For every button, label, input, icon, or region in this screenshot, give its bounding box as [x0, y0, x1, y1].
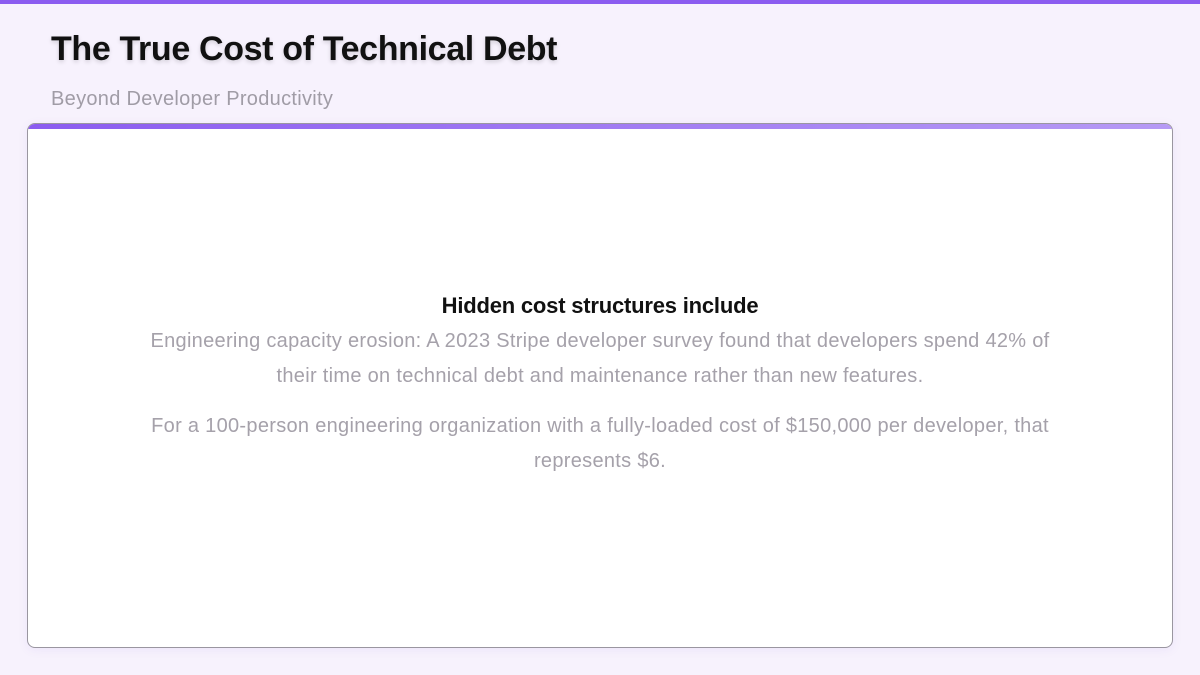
panel: main card	[27, 123, 1173, 648]
text block: hidden costs	[150, 293, 1050, 472]
paragraph 2: For a 100-person engineering organization with a fully-loaded cost of $150,000 per developer, that represents $6.	[151, 415, 1049, 472]
title: The True Cost of Technical Debt	[51, 30, 557, 68]
subtitle: Beyond Developer Productivity	[51, 88, 333, 110]
heading: Hidden cost structures include	[442, 293, 758, 318]
paragraph 1: Engineering capacity erosion: A 2023 Stripe developer survey found that developers spend 42% of their time on technical debt and maintenance rather than new features.	[150, 330, 1050, 387]
top accent bar	[0, 0, 1200, 4]
